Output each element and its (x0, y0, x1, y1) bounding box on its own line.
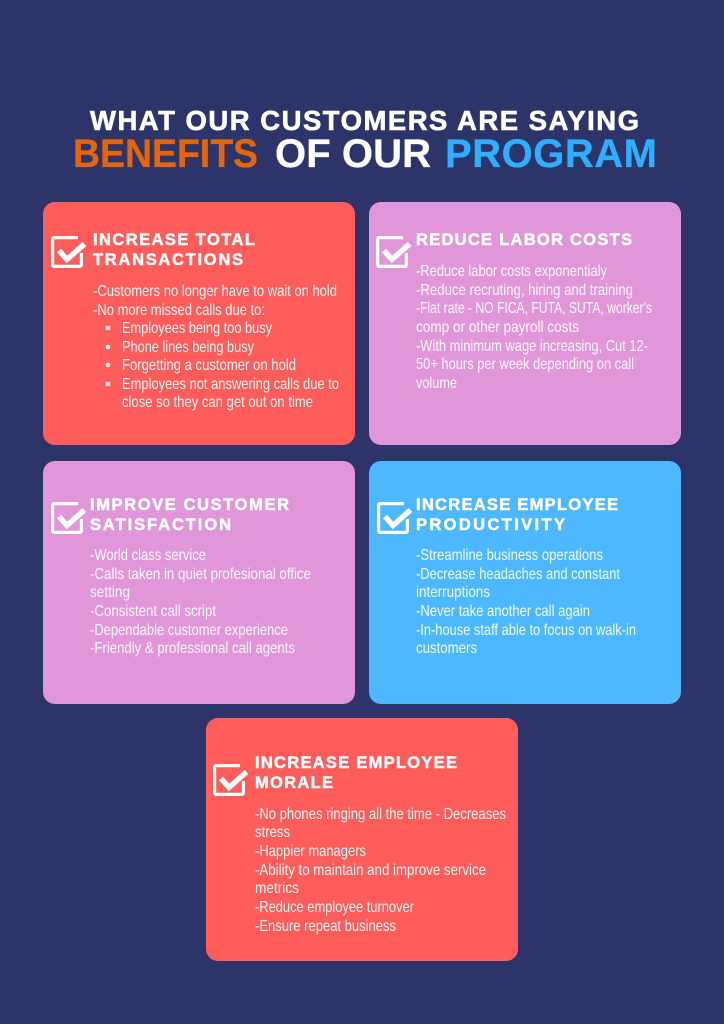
body text: -Never take another call again (416, 603, 590, 620)
heading: IMPROVE CUSTOMER (90, 496, 289, 514)
body text: Forgetting a customer on hold (122, 357, 296, 374)
body text: -In-house staff able to focus on walk-in (416, 622, 636, 639)
body text: -Reduce labor costs exponentialy (416, 263, 607, 280)
icon: checkbox (215, 766, 246, 794)
icon: checkbox (379, 504, 410, 532)
panel: reduce labor costs (369, 202, 681, 445)
body text: close so they can get out on time (122, 394, 313, 411)
body text: setting (90, 584, 130, 601)
body text (416, 547, 636, 657)
heading: SATISFACTION (90, 516, 231, 534)
heading: MORALE (255, 774, 333, 792)
body text: -Decrease headaches and constant (416, 566, 620, 583)
heading (90, 496, 289, 534)
heading: INCREASE TOTAL (93, 231, 255, 249)
body text: Employees not answering calls due to (122, 376, 339, 393)
heading: PRODUCTIVITY (416, 516, 565, 534)
body text: -Calls taken in quiet profesional office (90, 566, 311, 583)
body text: -No more missed calls due to: (93, 302, 265, 319)
body text: -With minimum wage increasing, Cut 12- (416, 338, 648, 355)
panel background (206, 718, 518, 961)
panel: increase total transactions (43, 202, 355, 445)
panel background (43, 202, 355, 445)
body text: -Reduce recruting, hiring and training (416, 282, 633, 299)
panel background (369, 461, 681, 704)
title word: program: PROGRAM (445, 132, 657, 176)
title line 1: WHAT OUR CUSTOMERS ARE SAYING (90, 105, 639, 136)
body text: -Reduce employee turnover (255, 899, 415, 916)
body text: -World class service (90, 547, 206, 564)
body text: Phone lines being busy (122, 339, 254, 356)
body text: comp or other payroll costs (416, 319, 579, 336)
body text: -No phones ringing all the time - Decreases (255, 806, 506, 823)
body text: -Ensure repeat business (255, 918, 396, 935)
body text: -Flat rate - NO FICA, FUTA, SUTA, worker's (416, 300, 652, 317)
heading: TRANSACTIONS (93, 251, 243, 269)
body text: volume (416, 375, 457, 392)
body text: -Friendly & professional call agents (90, 640, 295, 657)
body text: -Streamline business operations (416, 547, 603, 564)
heading (93, 231, 255, 269)
body text (90, 547, 311, 657)
heading: INCREASE EMPLOYEE (416, 496, 618, 514)
body text: -Happier managers (255, 843, 366, 860)
title word: benefits: BENEFITS (73, 132, 258, 176)
title words: of our: OF OUR (275, 132, 431, 176)
body text: Employees being too busy (122, 320, 272, 337)
heading: INCREASE EMPLOYEE (255, 754, 457, 772)
body text: metrics (255, 880, 299, 897)
heading (255, 754, 457, 792)
panel: increase employee productivity (369, 461, 681, 704)
panel background (43, 461, 355, 704)
body text: interruptions (416, 584, 490, 601)
panel background (369, 202, 681, 445)
body text: stress (255, 824, 290, 841)
body text: -Dependable customer experience (90, 622, 288, 639)
body text: 50+ hours per week depending on call (416, 356, 634, 373)
icon: checkbox (53, 238, 84, 266)
title (73, 105, 657, 176)
icon: checkbox (53, 504, 84, 532)
body text: -Customers no longer have to wait on hold (93, 283, 337, 300)
body text (416, 263, 652, 392)
panel: improve customer satisfaction (43, 461, 355, 704)
body text: -Ability to maintain and improve service (255, 862, 486, 879)
body text: customers (416, 640, 477, 657)
heading (416, 496, 618, 534)
heading: REDUCE LABOR COSTS (416, 231, 632, 249)
body text (93, 283, 339, 411)
icon: checkbox (378, 238, 410, 266)
body text (255, 806, 506, 935)
body text: -Consistent call script (90, 603, 216, 620)
panel: increase employee morale (206, 718, 518, 961)
